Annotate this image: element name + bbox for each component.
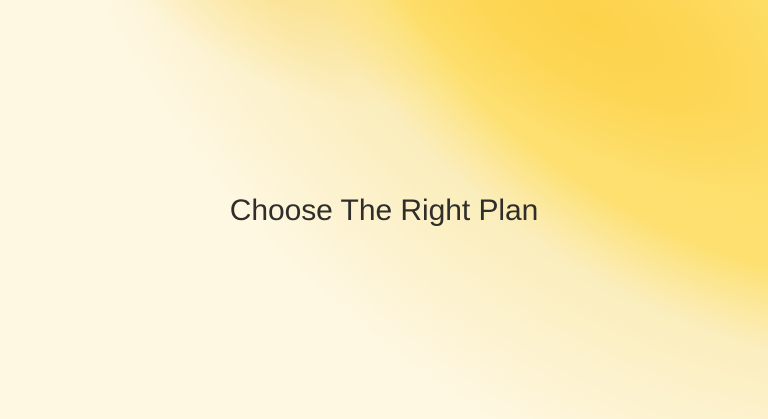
title: Choose The Right Plan xyxy=(230,194,538,227)
